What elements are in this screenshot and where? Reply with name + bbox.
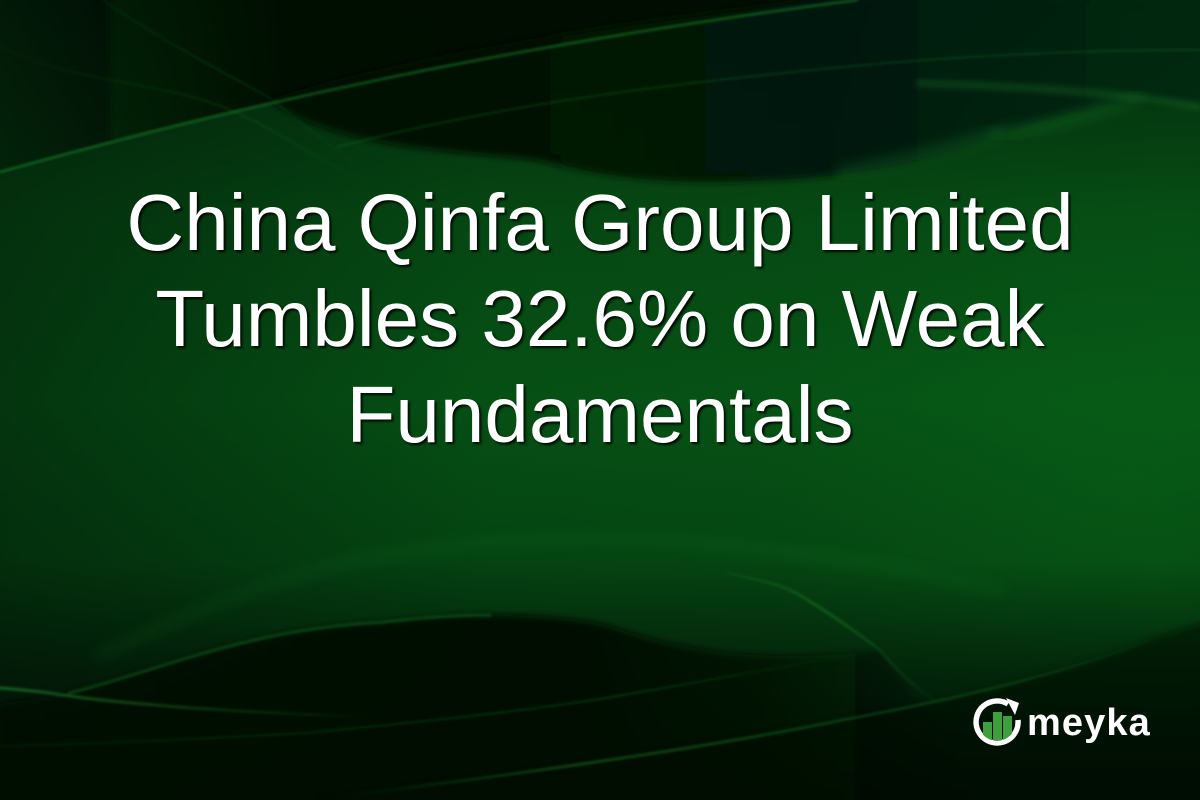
wordmark: meyka: [1027, 702, 1151, 744]
logo: meyka: [973, 698, 1151, 746]
title: China Qinfa Group Limited Tumbles 32.6% on Weak Fundamentals: [126, 178, 1074, 459]
bottom dark sweep: [0, 615, 990, 800]
top dark sweep: [0, 0, 857, 172]
icon: circular arrow with green bars: [976, 698, 1019, 743]
